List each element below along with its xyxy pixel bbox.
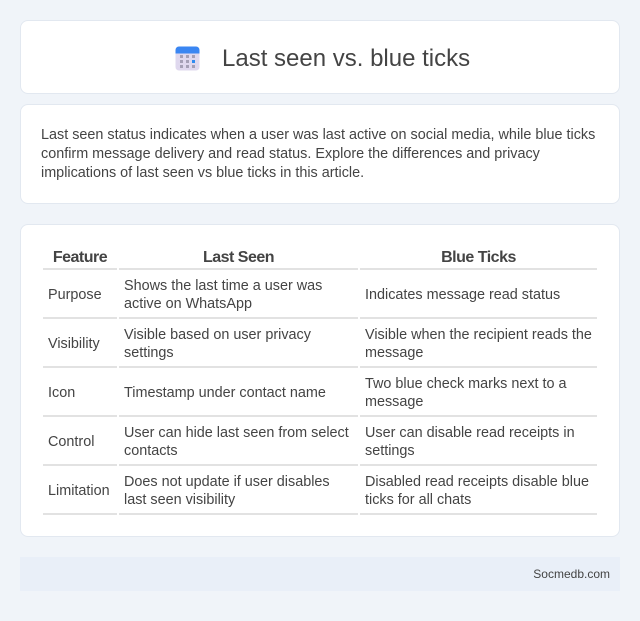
row: Icon: message <box>365 394 423 410</box>
row: Limitation: Limitation <box>48 483 110 499</box>
panel: title card <box>20 20 620 94</box>
row: Control: User can disable read receipts in <box>365 425 575 441</box>
row: Visibility <box>48 327 592 361</box>
row: Control: User can hide last seen from select <box>124 425 349 441</box>
description text: implications of last seen vs blue ticks in this article. <box>41 165 364 181</box>
row: Control: Control <box>48 434 94 450</box>
row: Limitation <box>48 474 589 508</box>
row: Purpose <box>48 278 560 312</box>
row: Icon: Timestamp under contact name <box>124 385 326 401</box>
row: Purpose: Shows the last time a user was <box>124 278 322 294</box>
description text: confirm message delivery and read status. Explore the differences and privacy <box>41 146 540 162</box>
table header: Blue Ticks <box>441 249 516 266</box>
table header: Last Seen <box>203 249 274 266</box>
row: Limitation: ticks for all chats <box>365 492 471 508</box>
footer bar <box>20 557 620 591</box>
row: Visibility: message <box>365 345 423 361</box>
row: Control: contacts <box>124 443 178 459</box>
row: Limitation: last seen visibility <box>124 492 235 508</box>
table header <box>53 249 516 266</box>
row: Visibility: settings <box>124 345 174 361</box>
row: Icon <box>48 376 567 410</box>
row: Purpose: Indicates message read status <box>365 287 560 303</box>
row: Control <box>48 425 575 459</box>
panel: comparison table <box>20 224 620 537</box>
panel: description <box>20 104 620 204</box>
row: Limitation: Does not update if user disables <box>124 474 330 490</box>
row: Icon: Two blue check marks next to a <box>365 376 567 392</box>
title: Last seen vs. blue ticks <box>222 45 470 72</box>
row: Icon: Icon <box>48 385 75 401</box>
row: Purpose: active on WhatsApp <box>124 296 252 312</box>
row: Control: settings <box>365 443 415 459</box>
row: Visibility: Visibility <box>48 336 100 352</box>
icon: calendar <box>176 46 200 70</box>
footer source label: Socmedb.com <box>533 567 610 581</box>
row: Visibility: Visible based on user privacy <box>124 327 311 343</box>
description text <box>41 127 595 181</box>
description text: Last seen status indicates when a user was last active on social media, while blue ticks <box>41 127 595 143</box>
table header: Feature <box>53 249 107 266</box>
row: Limitation: Disabled read receipts disable blue <box>365 474 589 490</box>
row: Visibility: Visible when the recipient reads the <box>365 327 592 343</box>
row: Purpose: Purpose <box>48 287 102 303</box>
